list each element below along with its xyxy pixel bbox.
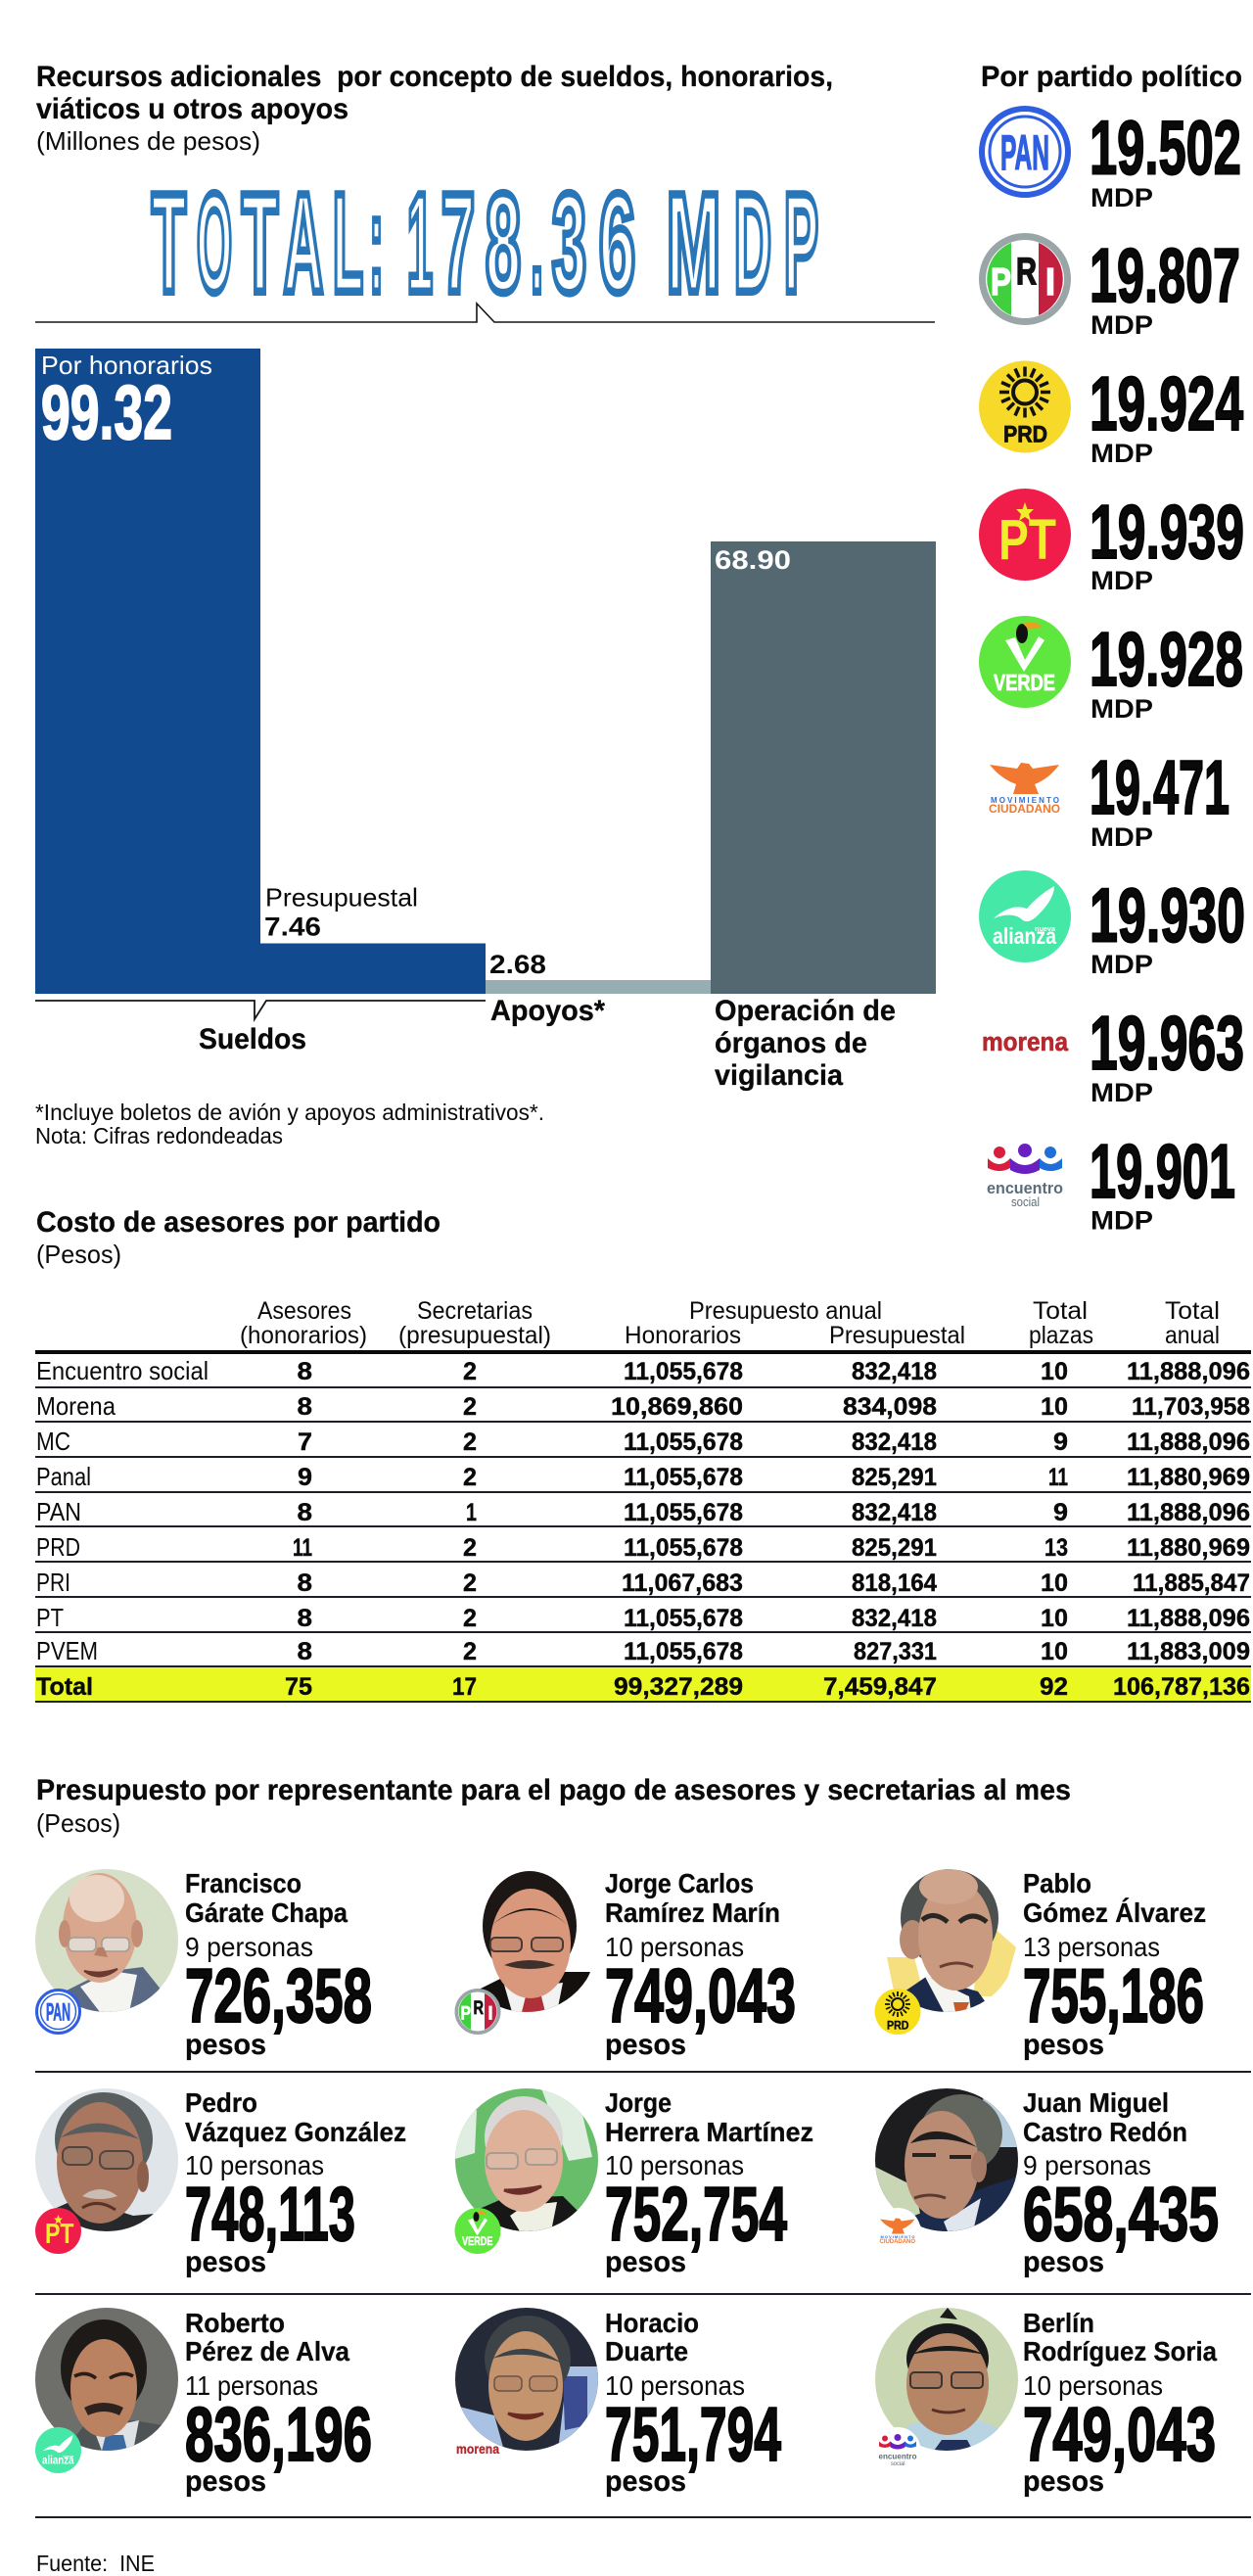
badge: PRI: P [460, 2003, 471, 2025]
total figure: M [667, 165, 720, 321]
table row: Encuentro social: 2 [463, 1358, 477, 1385]
table row: PT [35, 1603, 1251, 1633]
table row: PAN: 11,888,096 [1127, 1499, 1250, 1526]
card: Roberto Pérez de Alva: 11 personas [185, 2370, 318, 2401]
table row: MC: 11,055,678 [624, 1429, 743, 1456]
total figure: 3 [552, 165, 586, 321]
table header: Presupuestal [829, 1322, 965, 1349]
table header: anual [1165, 1322, 1220, 1349]
table row: PT: 11,888,096 [1127, 1605, 1250, 1632]
table row: PRD [35, 1532, 1251, 1563]
card: Roberto Pérez de Alva: 836,196 [185, 2391, 372, 2477]
card: Francisco Gárate Chapa: pesos [185, 2029, 266, 2061]
panel: por partido politico [979, 61, 1245, 1236]
logo: Movimiento Ciudadano: MOVIMIENTO [991, 796, 1059, 805]
table row: Total: Total [36, 1673, 93, 1701]
card: Berlín Rodríguez Soria: pesos [1023, 2465, 1104, 2498]
total figure: T [242, 165, 278, 321]
badge: PRI: I [487, 2003, 493, 2025]
card: Juan Miguel Castro Redón: Castro Redón [1023, 2117, 1187, 2147]
table row: PVEM: 11,055,678 [624, 1638, 743, 1665]
table row: Total: 75 [285, 1673, 312, 1701]
card: Pedro Vázquez González: pesos [185, 2246, 266, 2278]
party PT [979, 489, 1244, 595]
table row: Morena [35, 1391, 1251, 1423]
badge: Morena: morena [456, 2442, 499, 2457]
table row: Total: 17 [452, 1673, 477, 1701]
total figure: O [197, 165, 232, 321]
heading: presupuesto por representante: Presupuesto por representante para el pago de asesores y secretarias al mes [36, 1774, 1071, 1806]
card: Francisco Gárate Chapa: 9 personas [185, 1932, 313, 1962]
card: Pablo Gómez Álvarez: Gómez Álvarez [1023, 1897, 1206, 1928]
badge: Nueva Alianza [35, 2427, 81, 2473]
badge: PT [35, 2208, 81, 2254]
photo: Horacio Duarte [455, 2308, 598, 2451]
table row: Panal: Panal [36, 1462, 91, 1491]
badge: Nueva Alianza: nueva [63, 2455, 73, 2459]
card: Francisco Gárate Chapa: Gárate Chapa [185, 1897, 348, 1928]
photo: Pablo Gómez Álvarez [875, 1869, 1018, 2012]
badge: Encuentro Social: social [891, 2460, 905, 2467]
badge: PRI [454, 1989, 501, 2035]
card: Horacio Duarte: Duarte [605, 2336, 688, 2366]
badge: PAN: PAN [46, 1999, 70, 2027]
card: Juan Miguel Castro Redón [875, 2087, 1219, 2278]
card: Pablo Gómez Álvarez [875, 1868, 1206, 2061]
bracket: sueldos [35, 1001, 486, 1055]
panel: presupuesto por representante [35, 1774, 1251, 2518]
photo: Juan Miguel Castro Redón [875, 2088, 1018, 2231]
table row: PAN: 1 [466, 1499, 477, 1526]
table row: Encuentro social: 832,418 [852, 1358, 937, 1385]
card: Roberto Pérez de Alva: Pérez de Alva [185, 2336, 349, 2366]
table row: PAN: 8 [298, 1499, 312, 1526]
total figure: T [152, 165, 186, 321]
card: Jorge Carlos Ramírez Marín: Ramírez Marín [605, 1897, 780, 1928]
party PT: MDP [1091, 566, 1153, 595]
card: Pedro Vázquez González: 10 personas [185, 2150, 324, 2180]
card: Francisco Gárate Chapa: Francisco [185, 1868, 302, 1898]
heading: costo de asesores: Costo de asesores por partido [36, 1206, 441, 1239]
heading: additional resources: (Millones de pesos) [36, 126, 260, 156]
table row: Panal: 9 [298, 1464, 312, 1491]
card: Jorge Carlos Ramírez Marín: 10 personas [605, 1932, 744, 1962]
logo: Movimiento Ciudadano [989, 763, 1060, 816]
bar: operacion de organos de vigilancia: Operación de [715, 995, 896, 1027]
table row: Total: 92 [1040, 1673, 1068, 1701]
card: Jorge Carlos Ramírez Marín [454, 1868, 796, 2061]
party PAN [982, 104, 1241, 212]
photo: Berlín Rodríguez Soria [875, 2308, 1018, 2451]
party PRD: MDP [1091, 439, 1153, 468]
footnote: Nota: Cifras redondeadas [35, 1123, 283, 1148]
footnote: *Incluye boletos de avión y apoyos administrativos*. [35, 1100, 544, 1125]
table row: PRI: PRI [36, 1568, 70, 1597]
party Morena [982, 1000, 1244, 1107]
table row: PT: 832,418 [852, 1605, 937, 1632]
bar: operacion de organos de vigilancia: órganos de [715, 1027, 867, 1059]
card: Jorge Carlos Ramírez Marín: 749,043 [605, 1952, 796, 2038]
heading: presupuesto por representante: (Pesos) [36, 1808, 120, 1838]
logo: PAN: PAN [1000, 125, 1049, 180]
bar: apoyos: 2.68 [489, 950, 546, 979]
table row: PRD: 11 [293, 1534, 312, 1562]
table row: Morena: 8 [298, 1393, 312, 1421]
photo: Roberto Pérez de Alva [35, 2308, 178, 2451]
total figure: 6 [599, 165, 635, 321]
photo: Jorge Herrera Martínez [455, 2088, 598, 2231]
bar: apoyos [486, 950, 711, 1027]
logo: PRI [979, 233, 1071, 325]
card: Francisco Gárate Chapa: 726,358 [185, 1952, 372, 2038]
badge: Movimiento Ciudadano [875, 2208, 920, 2254]
table row: Encuentro social [35, 1356, 1251, 1388]
total figure: 6 [599, 165, 635, 321]
logo: PT [979, 489, 1071, 581]
party PRI [979, 232, 1240, 340]
card: Jorge Herrera Martínez [454, 2087, 813, 2278]
card: Horacio Duarte: Horacio [605, 2308, 699, 2338]
card: Jorge Herrera Martínez: 10 personas [605, 2150, 744, 2180]
total figure: 7 [441, 165, 475, 321]
table row: PT: 8 [298, 1605, 312, 1632]
table row: Panal: 11,880,969 [1127, 1464, 1250, 1491]
card: Jorge Carlos Ramírez Marín: pesos [605, 2029, 686, 2061]
party Encuentro Social [987, 1128, 1235, 1236]
total figure: L [333, 165, 363, 321]
table row: PRD: 11,880,969 [1127, 1534, 1250, 1562]
table row: MC: 11,888,096 [1127, 1429, 1250, 1456]
total figure: T [152, 165, 186, 321]
heading: additional resources: Recursos adicionales por concepto de sueldos, honorarios, [36, 61, 833, 93]
card: Juan Miguel Castro Redón: 9 personas [1023, 2150, 1151, 2180]
table row: PVEM: PVEM [36, 1636, 98, 1665]
bracket: sueldos: Sueldos [199, 1023, 306, 1055]
table row: Morena: 834,098 [843, 1393, 937, 1421]
badge: VERDE [454, 2208, 501, 2254]
badge: Nueva Alianza: alianza [42, 2456, 74, 2467]
logo: Encuentro Social: encuentro [987, 1179, 1063, 1197]
party PAN: MDP [1091, 183, 1153, 212]
party VERDE [979, 616, 1243, 724]
card: Jorge Carlos Ramírez Marín: Jorge Carlos [605, 1868, 754, 1898]
total figure: 1 [407, 165, 433, 321]
table row: Total: 99,327,289 [614, 1673, 743, 1701]
table row: PAN: 11,055,678 [624, 1499, 743, 1526]
table row: MC [35, 1427, 1251, 1458]
table row: PRI [35, 1568, 1251, 1598]
table row: Total: 106,787,136 [1113, 1673, 1250, 1701]
table row: MC: MC [36, 1427, 70, 1456]
table row: PVEM: 8 [298, 1638, 312, 1665]
table header: Asesores [257, 1297, 351, 1325]
bar: por honorarios: 99.32 [41, 369, 172, 455]
table row: PAN: PAN [36, 1497, 81, 1526]
party PRD [979, 360, 1243, 468]
table row: PVEM: 2 [463, 1638, 477, 1665]
table row: PT: PT [36, 1603, 64, 1632]
table row: MC: 9 [1053, 1429, 1068, 1456]
table header: Presupuesto anual [689, 1297, 882, 1325]
table row: Panal: 2 [463, 1464, 477, 1491]
bar: presupuestal: Presupuestal [265, 883, 418, 913]
total figure: O [197, 165, 232, 321]
table row: Encuentro social: 11,888,096 [1127, 1358, 1250, 1385]
logo: PRD [979, 360, 1071, 452]
source note: Fuente: INE [36, 2551, 155, 2576]
table row: PRD: PRD [36, 1532, 80, 1562]
total figure: D [734, 165, 771, 321]
card: Horacio Duarte: pesos [605, 2465, 686, 2498]
card: Juan Miguel Castro Redón: Juan Miguel [1023, 2087, 1169, 2118]
logo: Nueva Alianza [979, 870, 1071, 962]
total figure: : [370, 165, 384, 321]
bar: apoyos: Apoyos* [490, 995, 605, 1027]
table row: Morena: 11,703,958 [1132, 1393, 1250, 1421]
table row: MC: 832,418 [852, 1429, 937, 1456]
logo: Movimiento Ciudadano: CIUDADANO [989, 802, 1060, 816]
table row: PRI: 11,885,847 [1133, 1569, 1250, 1597]
table header: Honorarios [625, 1322, 741, 1349]
table row: Morena: Morena [36, 1391, 116, 1421]
table row: Panal: 11 [1048, 1464, 1068, 1491]
logo: Encuentro Social [987, 1144, 1063, 1209]
divider: row 1 [35, 2071, 1251, 2073]
total figure: . [531, 165, 542, 321]
panel: additional resources chart: P [784, 165, 818, 321]
table row: Morena: 2 [463, 1393, 477, 1421]
badge: VERDE: VERDE [462, 2236, 493, 2248]
card: Jorge Herrera Martínez: Jorge [605, 2087, 672, 2118]
photo: Francisco Gárate Chapa [35, 1869, 178, 2012]
card: Pedro Vázquez González: Vázquez González [185, 2117, 406, 2147]
table row: PRI: 818,164 [852, 1569, 937, 1597]
card: Berlín Rodríguez Soria: 10 personas [1023, 2370, 1163, 2401]
table row: Encuentro social: Encuentro social [36, 1356, 209, 1385]
footnote [35, 1100, 544, 1148]
table row: PRD: 13 [1044, 1534, 1068, 1562]
logo: Nueva Alianza: nueva [1035, 926, 1055, 933]
logo: PT: PT [998, 508, 1056, 572]
table row: PAN [35, 1497, 1251, 1527]
logo: PRD: PRD [1003, 421, 1047, 448]
table row: PT: 10 [1041, 1605, 1068, 1632]
badge: Movimiento Ciudadano: MOVIMIENTO [881, 2234, 914, 2239]
total figure [152, 165, 818, 321]
card: Roberto Pérez de Alva [35, 2308, 372, 2498]
table row: PVEM: 11,883,009 [1127, 1638, 1250, 1665]
total figure: A [284, 165, 323, 321]
table row: Total: 7,459,847 [823, 1673, 937, 1701]
logo: PRI: I [1045, 261, 1055, 304]
card: Jorge Herrera Martínez: pesos [605, 2246, 686, 2278]
total figure: 8 [486, 165, 521, 321]
badge: PAN [37, 1990, 80, 2033]
table row: PAN: 9 [1053, 1499, 1068, 1526]
bar: operacion de organos de vigilancia: vigilancia [715, 1059, 843, 1092]
party PRI: MDP [1091, 310, 1153, 340]
table row: Morena: 10,869,860 [611, 1393, 743, 1421]
card: Roberto Pérez de Alva: Roberto [185, 2308, 285, 2338]
logo: Encuentro Social: social [1011, 1194, 1040, 1209]
table row: Panal: 11,055,678 [624, 1464, 743, 1491]
table header: plazas [1029, 1322, 1093, 1349]
total figure: 1 [407, 165, 433, 321]
panel: costo de asesores table [35, 1206, 1251, 1703]
table header [35, 1297, 1251, 1354]
card: Horacio Duarte: 751,794 [605, 2391, 781, 2477]
card: Pablo Gómez Álvarez: pesos [1023, 2029, 1104, 2061]
party VERDE: MDP [1091, 694, 1153, 724]
logo: VERDE: VERDE [994, 670, 1055, 695]
total figure: L [333, 165, 363, 321]
card: Juan Miguel Castro Redón: pesos [1023, 2246, 1104, 2278]
badge: PRD [875, 1989, 920, 2035]
table row: PRD: 11,055,678 [624, 1534, 743, 1562]
table row: Morena: 10 [1041, 1393, 1068, 1421]
card: Roberto Pérez de Alva: pesos [185, 2465, 266, 2498]
table row: PAN: 832,418 [852, 1499, 937, 1526]
total figure: A [284, 165, 323, 321]
table header: Total [1165, 1297, 1220, 1325]
table header: (honorarios) [240, 1322, 367, 1349]
table row: PRI: 8 [298, 1569, 312, 1597]
total figure: 7 [441, 165, 475, 321]
table row: PVEM: 827,331 [854, 1638, 937, 1665]
card: Jorge Herrera Martínez: 752,754 [605, 2171, 787, 2257]
logo: PRI: R [1016, 251, 1037, 293]
card: Horacio Duarte [455, 2308, 781, 2498]
heading: por partido politico: Por partido político [981, 61, 1242, 93]
total figure: M [667, 165, 720, 321]
table header: (presupuestal) [398, 1322, 551, 1349]
table row: Encuentro social: 11,055,678 [624, 1358, 743, 1385]
heading: presupuesto por representante [36, 1774, 1071, 1838]
heading: additional resources [36, 61, 833, 156]
card: Horacio Duarte: 10 personas [605, 2370, 745, 2401]
badge: PRD: PRD [887, 2019, 909, 2033]
total figure: . [531, 165, 542, 321]
table row: MC: 2 [463, 1429, 477, 1456]
panel: additional resources chart: P [784, 165, 818, 321]
bar: por honorarios: Por honorarios [41, 351, 212, 380]
pointer line under total [35, 304, 935, 322]
card: Pedro Vázquez González: 748,113 [185, 2171, 355, 2257]
logo: Morena: morena [982, 1027, 1069, 1056]
table row: MC: 7 [298, 1429, 312, 1456]
table row: Encuentro social: 10 [1041, 1358, 1068, 1385]
card: Francisco Gárate Chapa [35, 1868, 372, 2061]
card: Jorge Herrera Martínez: Herrera Martínez [605, 2117, 813, 2147]
table row: PRD: 825,291 [852, 1534, 937, 1562]
logo: PRI: P [991, 261, 1011, 304]
party Nueva Alianza: MDP [1091, 950, 1153, 979]
logo: Nueva Alianza: alianza [993, 923, 1056, 949]
card: Pedro Vázquez González: Pedro [185, 2087, 257, 2118]
panel: additional resources chart [35, 61, 936, 1148]
table header: Total [1033, 1297, 1088, 1325]
party Movimiento Ciudadano [989, 744, 1230, 852]
table row: Total [35, 1665, 1251, 1703]
card: Berlín Rodríguez Soria [875, 2308, 1217, 2498]
total figure: : [370, 165, 384, 321]
party Morena: MDP [1091, 1078, 1153, 1107]
table row: PRI: 2 [463, 1569, 477, 1597]
bar: presupuestal [260, 883, 486, 994]
heading: costo de asesores: (Pesos) [36, 1240, 121, 1269]
badge: PT: PT [45, 2219, 74, 2250]
table row: Panal [35, 1462, 1251, 1493]
bar: presupuestal: 7.46 [264, 913, 321, 942]
heading: costo de asesores [36, 1206, 441, 1269]
total figure: 3 [552, 165, 586, 321]
divider: row 3 [35, 2516, 1251, 2518]
total figure: T [242, 165, 278, 321]
table row: PRI: 11,067,683 [622, 1569, 743, 1597]
card: Pedro Vázquez González [35, 2087, 406, 2278]
bar: operacion de organos de vigilancia: 68.90 [715, 545, 791, 575]
card: Berlín Rodríguez Soria: Rodríguez Soria [1023, 2336, 1217, 2366]
divider: row 2 [35, 2293, 1251, 2295]
table row: Encuentro social: 8 [298, 1358, 312, 1385]
party Nueva Alianza [979, 870, 1245, 979]
logo: PAN [982, 109, 1068, 195]
total figure: 8 [486, 165, 521, 321]
heading: additional resources: viáticos u otros apoyos [36, 93, 348, 125]
photo: Pedro Vázquez González [35, 2088, 178, 2231]
table row: PT: 11,055,678 [624, 1605, 743, 1632]
logo: VERDE [979, 616, 1071, 708]
table row: PRI: 10 [1041, 1569, 1068, 1597]
card: Pablo Gómez Álvarez: Pablo [1023, 1868, 1091, 1898]
table header: Secretarias [417, 1297, 533, 1325]
badge: Encuentro Social [875, 2427, 920, 2473]
party Movimiento Ciudadano: MDP [1091, 822, 1153, 852]
table row: PRD: 2 [463, 1534, 477, 1562]
card: Berlín Rodríguez Soria: Berlín [1023, 2308, 1094, 2338]
badge: Encuentro Social: encuentro [879, 2452, 916, 2461]
badge: Movimiento Ciudadano: CIUDADANO [879, 2239, 915, 2245]
photo: Jorge Carlos Ramírez Marín [480, 1871, 590, 2012]
table row: Panal: 825,291 [852, 1464, 937, 1491]
card: Pablo Gómez Álvarez: 13 personas [1023, 1932, 1160, 1962]
bar: por honorarios [35, 349, 260, 994]
table row: PVEM [36, 1636, 1250, 1665]
table row: PT: 2 [463, 1605, 477, 1632]
party Encuentro Social: MDP [1091, 1206, 1153, 1236]
total figure: D [734, 165, 771, 321]
badge: PRI: R [474, 1997, 484, 2019]
bar: operacion de organos de vigilancia [711, 541, 936, 1092]
table row: PVEM: 10 [1041, 1638, 1068, 1665]
